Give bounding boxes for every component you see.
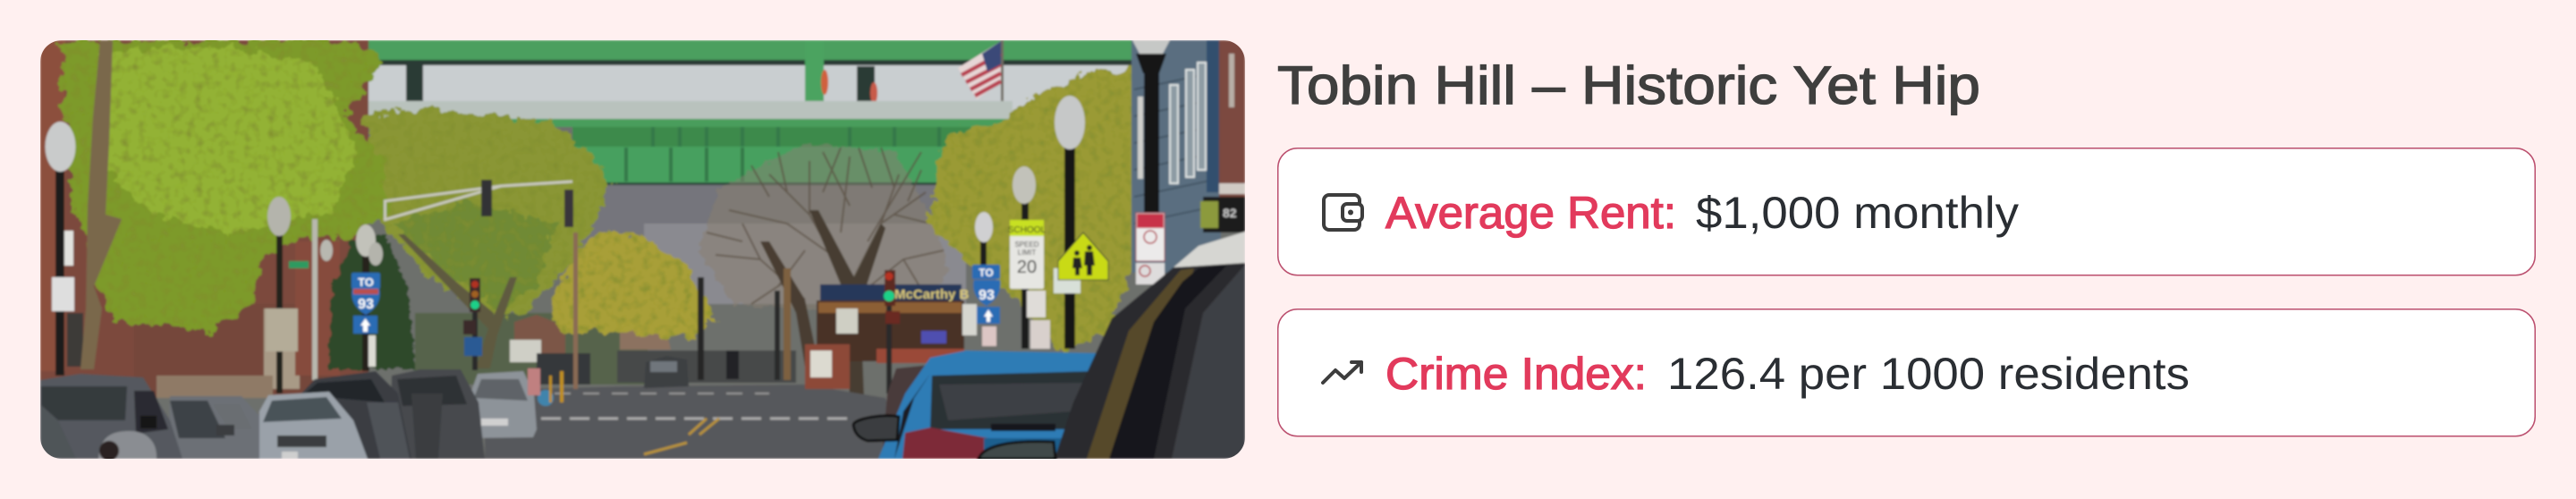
school speed limit sign	[1008, 220, 1046, 289]
icon: trending up arrow	[1323, 362, 1361, 383]
card: crime index	[1278, 309, 2535, 436]
card: average rent	[1278, 148, 2535, 275]
blue car	[878, 351, 1102, 459]
no parking signs	[1136, 213, 1165, 284]
value: crime index: 126.4 per 1000 residents	[1667, 349, 2190, 399]
blue clapboard house: 82	[1223, 206, 1237, 220]
right olive tree	[930, 67, 1138, 353]
school speed limit sign: SCHOOL	[1008, 225, 1046, 235]
left street lamps	[45, 122, 383, 393]
yellow tree behind road	[550, 231, 716, 338]
school speed limit sign: LIMIT	[1018, 249, 1036, 257]
distant car and pedestrian	[644, 268, 791, 388]
highway 93 sign left	[352, 273, 380, 334]
photo: street scene with green bridge	[40, 40, 1245, 461]
pedestrian crossing sign	[1058, 233, 1108, 280]
highway 93 sign left: 93	[358, 297, 374, 312]
black SUV foreground right	[979, 232, 1245, 459]
brick building left	[40, 40, 369, 398]
label: average rent: Average Rent:	[1385, 188, 1676, 238]
right 93 sign: TO	[979, 266, 994, 279]
label: crime index: Crime Index:	[1385, 349, 1647, 399]
bridge upper deck	[367, 40, 1133, 102]
blue clapboard house	[1131, 40, 1245, 273]
black SUV	[300, 371, 411, 459]
title: Tobin Hill – Historic Yet Hip	[1277, 55, 1980, 115]
big left tree canopy	[63, 40, 386, 331]
lamp post by house	[1132, 40, 1170, 215]
right 93 sign: 93	[979, 288, 995, 303]
sky	[367, 63, 1131, 112]
centre tree canopy	[367, 109, 612, 317]
American flag	[958, 41, 1001, 99]
silver Chevy	[259, 392, 368, 459]
background low buildings and fence	[415, 313, 796, 385]
car side mirror	[853, 416, 899, 441]
road	[485, 385, 903, 459]
right 93 sign	[972, 265, 1000, 324]
second traffic light	[884, 270, 900, 393]
traffic signal arm	[384, 180, 578, 389]
bridge railing and lower deck	[369, 101, 1013, 185]
shop McCarthy	[805, 284, 970, 389]
value: average rent: $1,000 monthly	[1696, 188, 2019, 238]
school speed limit sign: 20	[1017, 258, 1037, 277]
parked cars left	[40, 369, 537, 461]
highway 93 sign left: TO	[358, 275, 374, 289]
centre tree trunk	[398, 234, 517, 368]
school speed limit sign: SPEED	[1014, 241, 1039, 249]
grey SUV foreground	[40, 374, 182, 459]
icon: wallet	[1324, 195, 1362, 230]
bare trees	[698, 143, 948, 398]
dark SUV 2	[390, 369, 485, 459]
shop McCarthy: McCarthy B	[894, 287, 970, 302]
car behind blue car	[883, 365, 925, 445]
bicycle and bollards	[528, 368, 564, 406]
grey building behind	[555, 185, 957, 275]
silver SUV	[470, 371, 537, 438]
big left tree trunk	[80, 40, 122, 369]
right lamps and signs	[962, 96, 1085, 349]
dark grey car	[170, 395, 258, 458]
conifer	[328, 234, 417, 369]
